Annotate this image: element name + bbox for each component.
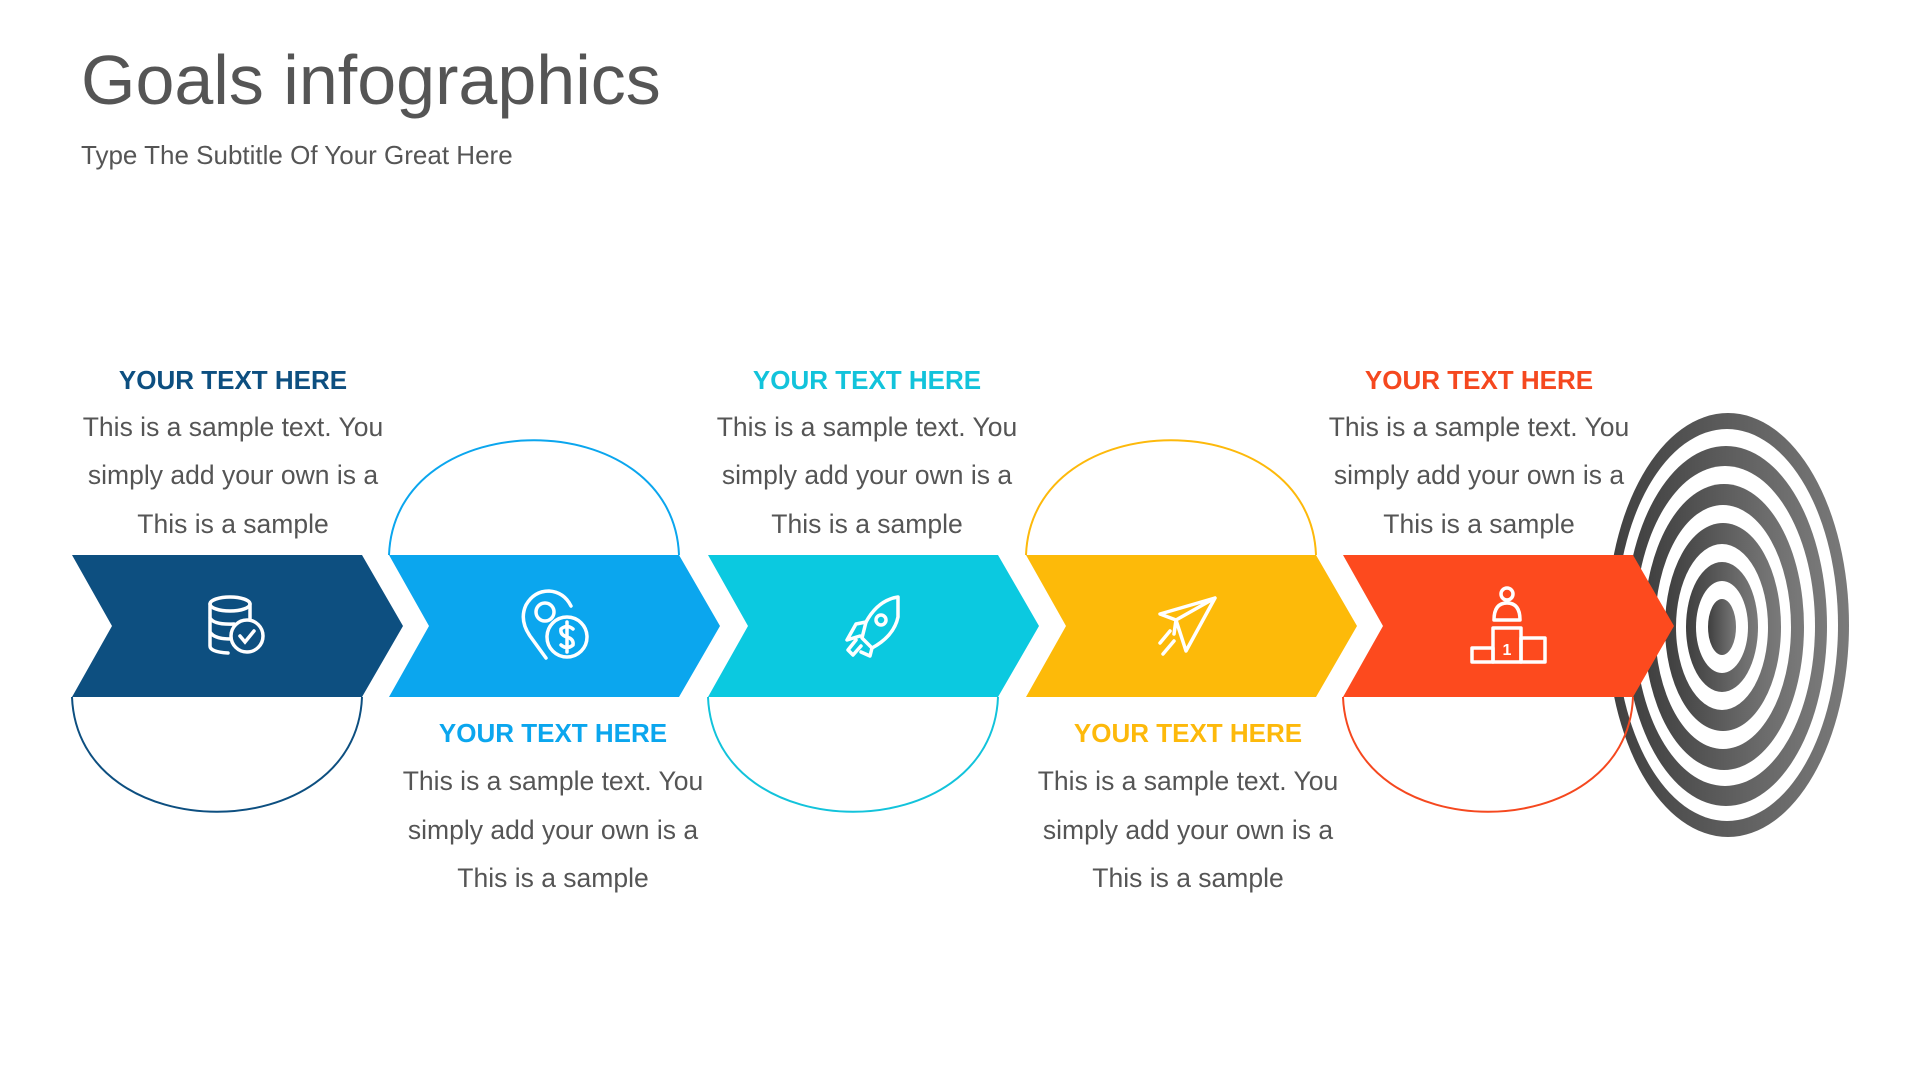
chevron 4 — [1026, 555, 1357, 697]
text block 2: YOUR TEXT HERE — [439, 718, 667, 748]
arc: above chevron 4 — [1026, 440, 1316, 555]
arc: below chevron 3 — [708, 697, 998, 812]
icon: rocket — [847, 597, 898, 656]
arc: above chevron 2 — [389, 440, 679, 555]
subtitle: Type The Subtitle Of Your Great Here — [81, 140, 513, 170]
chevron 2 — [389, 555, 720, 697]
text block 1 — [83, 365, 383, 539]
icon: target — [1607, 413, 1849, 837]
text block 4: This is a sample — [1092, 863, 1284, 893]
text block 5 — [1329, 365, 1629, 539]
title: Goals infographics — [81, 41, 661, 119]
text block 1: This is a sample text. You — [83, 412, 383, 442]
chevron 1 — [72, 555, 403, 697]
text block 4: YOUR TEXT HERE — [1074, 718, 1302, 748]
chevron 3 — [708, 555, 1039, 697]
text block 4: This is a sample text. You — [1038, 766, 1338, 796]
icon: location dollar — [523, 591, 587, 658]
text block 5: This is a sample text. You — [1329, 412, 1629, 442]
text block 3 — [717, 365, 1017, 539]
text block 3: YOUR TEXT HERE — [753, 365, 981, 395]
icon: podium: 1 — [1503, 642, 1512, 659]
arc: below chevron 1 — [72, 697, 362, 812]
text block 2: This is a sample — [457, 863, 649, 893]
text block 1: This is a sample — [137, 509, 329, 539]
icon: podium — [1472, 588, 1545, 662]
text block 1: YOUR TEXT HERE — [119, 365, 347, 395]
text block 5: YOUR TEXT HERE — [1365, 365, 1593, 395]
text block 5: This is a sample — [1383, 509, 1575, 539]
text block 1: simply add your own is a — [88, 460, 378, 490]
text block 4 — [1038, 718, 1338, 893]
icon: paper plane — [1160, 598, 1215, 654]
text block 2: This is a sample text. You — [403, 766, 703, 796]
text block 4: simply add your own is a — [1043, 815, 1333, 845]
text block 2 — [403, 718, 703, 893]
text block 3: simply add your own is a — [722, 460, 1012, 490]
icon: database check — [210, 597, 263, 653]
text block 3: This is a sample text. You — [717, 412, 1017, 442]
chevron 5 — [1343, 555, 1674, 697]
text block 3: This is a sample — [771, 509, 963, 539]
text block 2: simply add your own is a — [408, 815, 698, 845]
arc: below chevron 5 — [1343, 697, 1633, 812]
text block 5: simply add your own is a — [1334, 460, 1624, 490]
